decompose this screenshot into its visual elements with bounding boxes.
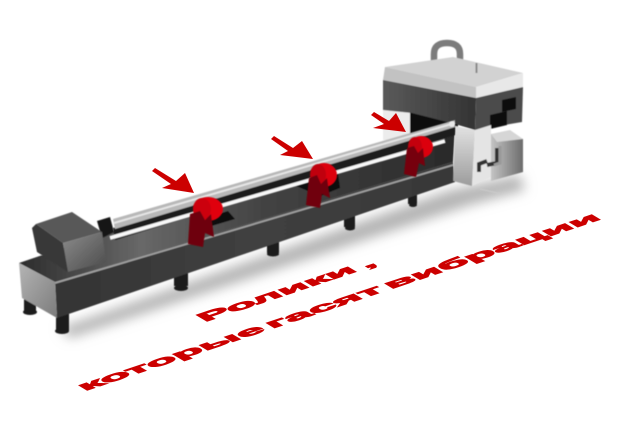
box top (36, 212, 102, 243)
caption line 1: Ролики , (192, 257, 382, 324)
support feet (23, 193, 417, 334)
roller 1 (188, 197, 223, 247)
antenna (476, 63, 478, 73)
roller 2 (306, 163, 337, 208)
bed end face (19, 263, 57, 318)
arrow 1 (152, 168, 194, 193)
roller slots (205, 173, 340, 228)
caption line 2: которые гасят вибрации (72, 211, 606, 393)
rod tip (449, 121, 455, 127)
dark band (383, 80, 476, 130)
roller 3 (404, 136, 433, 177)
left drive box (32, 212, 114, 272)
top cover (385, 57, 523, 87)
bed top edge highlight (55, 165, 453, 283)
arrow 3 (371, 112, 406, 132)
cutting head unit (383, 43, 523, 194)
coupler (97, 217, 114, 238)
bed interior (19, 128, 455, 282)
guide rods (110, 120, 455, 240)
floor shadow (60, 175, 525, 338)
lifting handle (434, 43, 460, 72)
white lower rod (110, 141, 445, 238)
control bracket (479, 148, 497, 172)
top rod (113, 120, 455, 229)
machine bed (19, 128, 455, 334)
rear panel (383, 108, 412, 145)
box front (32, 224, 68, 272)
box side (63, 232, 106, 272)
arrow 2 (271, 136, 313, 159)
floor mark (480, 189, 502, 194)
bed side panel (55, 162, 455, 318)
screens (502, 97, 516, 112)
opening (410, 110, 458, 140)
rear cabinet (491, 134, 523, 181)
front column (453, 126, 475, 186)
rod shadow (113, 127, 455, 240)
